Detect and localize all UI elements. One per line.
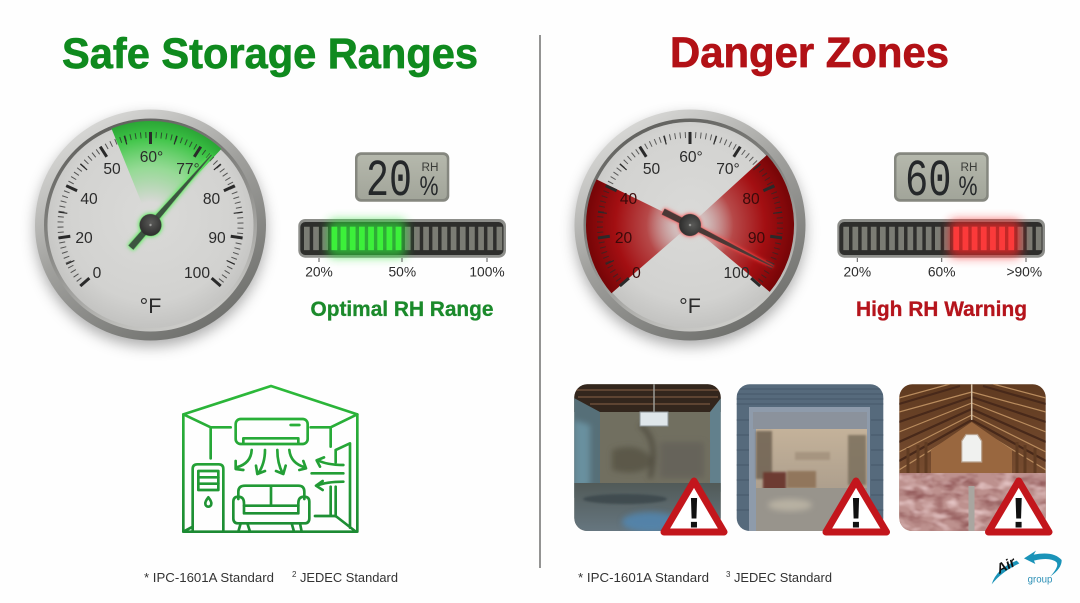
- LCD readout: 20% RH: RH: [422, 162, 438, 174]
- icon: climate-controlled room: [183, 386, 357, 532]
- photo: attic with insulation: [899, 384, 1046, 531]
- dial numbers: 60°: [679, 149, 703, 166]
- dial numbers: 70°: [716, 161, 740, 178]
- dial numbers: [75, 149, 226, 282]
- dial numbers: 80: [742, 191, 760, 208]
- icon: warning triangle garage: !: [849, 490, 863, 538]
- footnotes: danger column: JEDEC Standard: [734, 570, 832, 585]
- needle with green glow: [123, 148, 220, 255]
- air conditioner: [236, 419, 308, 444]
- needle with red glow: [658, 202, 778, 276]
- dial numbers: 50: [103, 161, 121, 178]
- unit label: °F: [679, 294, 701, 318]
- label: Optimal RH Range: Optimal RH Range: [310, 298, 494, 321]
- LCD readout: 60% RH: RH: [960, 162, 978, 174]
- humidity bar: warning: [837, 219, 1045, 258]
- tick marks: [58, 132, 243, 286]
- label: High RH Warning: High RH Warning: [856, 298, 1027, 321]
- dial numbers: [615, 149, 765, 282]
- footnotes: danger column: [578, 570, 832, 585]
- bar scale labels: warning: 60%: [928, 264, 956, 280]
- logo: Air group: [992, 551, 1062, 586]
- dehumidifier unit: [183, 464, 223, 532]
- sofa: [233, 486, 309, 532]
- dial numbers: 60°: [140, 149, 163, 166]
- bar scale labels: warning: >90%: [1006, 264, 1042, 280]
- dial numbers: 20: [75, 230, 93, 247]
- title: Safe Storage Ranges: Safe Storage Ranges: [62, 30, 478, 78]
- cool air arrows: [236, 450, 343, 490]
- dial numbers: 40: [80, 191, 98, 208]
- tick marks: [598, 132, 782, 286]
- icon: warning triangle basement: [664, 481, 724, 538]
- door: [315, 443, 355, 531]
- dial numbers: 100: [723, 265, 750, 282]
- dial numbers: 100: [184, 265, 210, 282]
- red hot danger wedge: [690, 155, 794, 292]
- icon: warning triangle attic: !: [1012, 490, 1026, 538]
- logo: Air group: group: [1028, 575, 1052, 586]
- photo: dusty garage: [736, 384, 884, 531]
- dial numbers: 0: [93, 265, 102, 282]
- bar scale labels: optimal: [305, 258, 505, 280]
- dial numbers: 90: [208, 230, 226, 247]
- bar scale labels: optimal: 20%: [305, 264, 333, 280]
- dial numbers: 77°: [176, 161, 200, 178]
- bar scale labels: warning: 20%: [843, 264, 871, 280]
- LCD readout: 60% RH: %: [958, 171, 978, 201]
- footnotes: danger column: 3: [726, 570, 731, 579]
- icon: warning triangle basement: !: [687, 490, 701, 538]
- bar scale labels: optimal: 100%: [469, 264, 505, 280]
- footnotes: safe column: [144, 570, 398, 585]
- dial numbers: 80: [203, 191, 220, 208]
- dial numbers: 90: [748, 230, 765, 247]
- dial numbers: 50: [643, 161, 660, 178]
- bar scale labels: warning: [843, 258, 1042, 280]
- footnotes: danger column: * IPC-1601A Standard: [578, 570, 709, 585]
- title: Danger Zones: Danger Zones: [670, 29, 949, 77]
- humidity bar: optimal: [298, 219, 506, 258]
- LCD readout: 60% RH: [894, 152, 989, 211]
- gauge: safe temperature dial: [35, 110, 266, 340]
- unit label: °F: [140, 294, 161, 318]
- footnotes: safe column: 2: [292, 570, 297, 579]
- LCD readout: 20% RH: [355, 152, 449, 211]
- footnotes: safe column: JEDEC Standard: [300, 570, 398, 585]
- red cold danger wedge: [586, 179, 690, 293]
- icon: warning triangle attic: [988, 481, 1049, 538]
- LCD readout: 20% RH: 20: [366, 152, 412, 211]
- gauge: danger temperature dial: [574, 110, 806, 340]
- icon: warning triangle garage: [826, 481, 886, 538]
- LCD readout: 60% RH: 60: [905, 152, 952, 211]
- green safe wedge: [112, 121, 221, 225]
- dial numbers: 0: [632, 265, 641, 282]
- photo: damp basement: [574, 384, 721, 532]
- footnotes: safe column: * IPC-1601A Standard: [144, 570, 274, 585]
- dial numbers: 20: [615, 230, 632, 247]
- dial numbers: 40: [620, 191, 637, 208]
- LCD readout: 20% RH: %: [420, 171, 438, 201]
- bar scale labels: optimal: 50%: [388, 264, 416, 280]
- logo: Air group: Air: [993, 553, 1019, 577]
